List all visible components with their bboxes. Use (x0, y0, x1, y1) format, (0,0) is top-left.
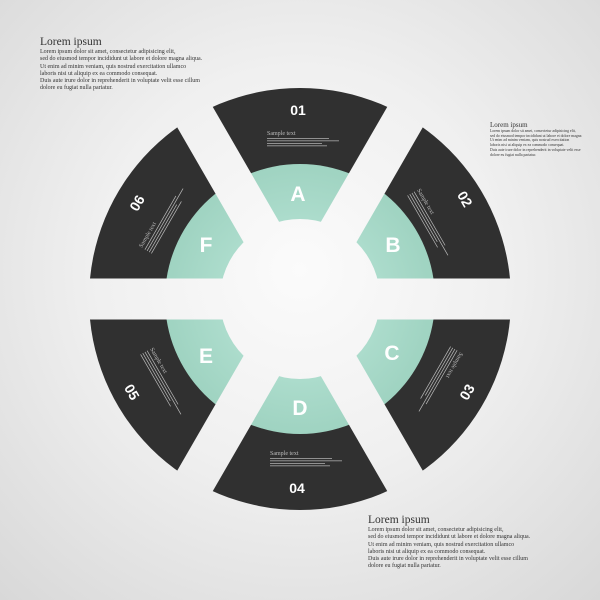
segment labels: E (199, 345, 213, 368)
segment labels: 06 (126, 192, 148, 214)
sample text: segment 04: Sample text (270, 451, 299, 457)
segment labels: 05 (121, 381, 143, 403)
text block: bottom: dolore eu fugiat nulla pariatur. (368, 563, 441, 569)
text block: top left: Lorem ipsum dolor sit amet, consectetur adipisicing elit, (40, 49, 175, 55)
text block: right: Lorem ipsum (490, 121, 528, 129)
segment labels: F (200, 234, 213, 257)
segment labels: 02 (454, 188, 476, 210)
segment labels: A (290, 183, 306, 206)
sample text: segment 06: Sample text (139, 221, 158, 249)
sample text: segment 01: Sample text (267, 131, 296, 137)
sample text: segment 04 (270, 451, 342, 466)
text block: right: Duis aute irure dolor in reprehenderit in voluptate velit esse (490, 148, 581, 152)
text block: right: laboris nisi ut aliquip ex ea commodo consequat. (490, 143, 564, 147)
segment labels: B (385, 234, 401, 257)
segment labels: 04 (289, 480, 305, 496)
text block: right: Lorem ipsum dolor sit amet, consectetur adipisicing elit, (490, 129, 576, 133)
chart: segmented circle (90, 88, 510, 510)
ring segments (89, 88, 511, 510)
text block: bottom: sed do eiusmod tempor incididunt ut labore et dolore magna aliqua. (368, 534, 530, 540)
text block: right: Ut enim ad minim veniam, quis nostrud exercitation (490, 138, 569, 142)
text block: right (490, 121, 582, 157)
text block: bottom (368, 514, 530, 569)
text block: top left: sed do eiusmod tempor incididunt ut labore et dolore magna aliqua. (40, 56, 202, 62)
sample text: segment 02 (407, 188, 456, 258)
text block: bottom: Lorem ipsum dolor sit amet, consectetur adipisicing elit, (368, 527, 503, 533)
segment labels (121, 102, 478, 496)
text block: right: sed do eiusmod tempor incididunt ut labore et dolore magna (490, 134, 581, 138)
text block: top left: laboris nisi ut aliquip ex ea commodo consequat. (40, 71, 157, 77)
text block: top left: Lorem ipsum (40, 36, 102, 48)
sample text: segment 02: Sample text (415, 188, 435, 216)
text block: top left: Duis aute irure dolor in reprehenderit in voluptate velit esse cillum (40, 78, 200, 84)
segment labels: D (292, 397, 308, 420)
text block: right: dolore eu fugiat nulla pariatur. (490, 153, 536, 157)
segment labels: 03 (456, 381, 478, 403)
text block: top left (40, 36, 202, 91)
sample text: segment 03 (414, 346, 463, 416)
text block: top left: Ut enim ad minim veniam, quis nostrud exercitation ullamco (40, 64, 186, 70)
segment labels: 01 (290, 102, 306, 118)
segment labels: C (384, 342, 400, 365)
text block: bottom: Duis aute irure dolor in reprehenderit in voluptate velit esse cillum (368, 556, 528, 562)
text block: bottom: laboris nisi ut aliquip ex ea commodo consequat. (368, 549, 485, 555)
text block: top left: dolore eu fugiat nulla pariatur. (40, 85, 113, 91)
text block: bottom: Lorem ipsum (368, 514, 430, 526)
sample text: segment 05: Sample text (148, 347, 168, 375)
text block: bottom: Ut enim ad minim veniam, quis nostrud exercitation ullamco (368, 542, 514, 548)
sample text: segment 03: Sample text (444, 351, 463, 379)
sample text: segment 05 (140, 347, 189, 417)
sample text: segment 01 (267, 131, 339, 146)
sample text: segment 06 (139, 184, 188, 254)
